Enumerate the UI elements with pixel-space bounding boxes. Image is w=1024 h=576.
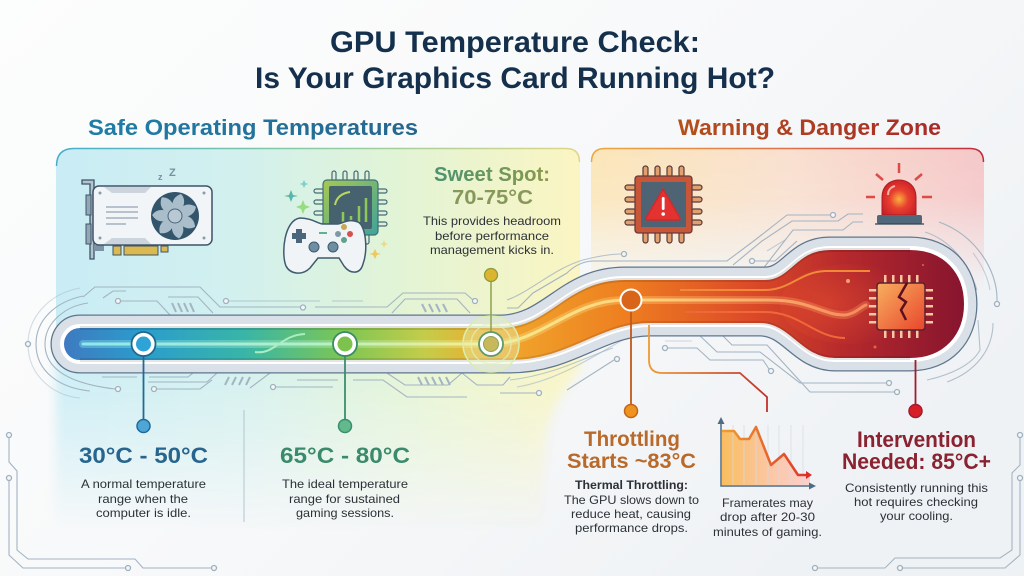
text block: throttling: performance drops. <box>575 521 688 535</box>
text block: sweet spot: before performance <box>435 229 549 243</box>
title: GPU Temperature Check: <box>330 26 700 59</box>
icon: gaming chip and controller <box>284 171 388 273</box>
text block: 65-80 gaming: The ideal temperature <box>282 477 408 491</box>
chart: framerate drop <box>718 417 816 490</box>
text block: 30-50 idle: 30°C - 50°C <box>79 443 208 468</box>
text block: framerates: drop after 20-30 <box>720 510 815 524</box>
icon: graphics card with zz: Z <box>169 167 176 179</box>
circuit traces <box>9 214 1020 568</box>
text block: intervention: hot requires checking <box>854 495 978 509</box>
icon: graphics card with zz <box>82 167 212 259</box>
text block: throttling: Starts ~83°C <box>567 450 696 473</box>
text block: sweet spot <box>423 164 561 257</box>
heading: safe operating temperatures: Safe Operating Temperatures <box>88 115 418 140</box>
icon: graphics card with zz: z <box>158 172 163 182</box>
text block: intervention <box>842 427 991 523</box>
marker: throttling <box>620 290 642 418</box>
text block: throttling: Throttling <box>584 428 680 451</box>
marker: idle 30-50 <box>132 332 156 432</box>
icon: chip with warning triangle <box>625 166 702 243</box>
text block: throttling: The GPU slows down to <box>564 493 699 507</box>
title: Is Your Graphics Card Running Hot? <box>255 62 775 95</box>
text block: intervention: Consistently running this <box>845 481 988 495</box>
text block: intervention: Intervention <box>857 427 976 452</box>
text block: 65-80 gaming <box>280 443 410 520</box>
text block: throttling: reduce heat, causing <box>571 507 691 521</box>
text block: intervention: Needed: 85°C+ <box>842 449 991 474</box>
text block: framerates <box>713 496 822 539</box>
text block: framerates: minutes of gaming. <box>713 525 822 539</box>
panel: safe operating temperatures <box>51 148 585 508</box>
text block: sweet spot: 70-75°C <box>452 187 533 209</box>
text block: sweet spot: This provides headroom <box>423 214 561 228</box>
circuit trace nodes <box>6 212 1022 570</box>
connector: framerate line <box>649 325 767 412</box>
divider between ranges <box>243 410 245 522</box>
text block: sweet spot: management kicks in. <box>430 243 554 257</box>
text block: 30-50 idle: range when the <box>98 492 188 506</box>
text block: 30-50 idle: computer is idle. <box>96 506 191 520</box>
text block: intervention: your cooling. <box>880 509 953 523</box>
text block: 65-80 gaming: gaming sessions. <box>296 506 394 520</box>
icon: cracked overheating chip <box>846 264 933 348</box>
title <box>255 26 775 95</box>
text block: 65-80 gaming: range for sustained <box>289 492 400 506</box>
text block: framerates: Framerates may <box>722 496 813 510</box>
text block: throttling <box>564 428 699 535</box>
marker: intervention <box>909 360 922 418</box>
marker: sweet spot halo <box>463 268 519 372</box>
marker: gaming 65-80 <box>333 332 357 432</box>
heading: warning and danger zone: Warning & Danger Zone <box>678 115 941 140</box>
icon: red alarm siren <box>866 163 932 224</box>
text block: throttling: Thermal Throttling: <box>575 478 688 492</box>
hatch marks <box>172 303 450 385</box>
text block: sweet spot: Sweet Spot: <box>434 164 550 186</box>
panel: warning and danger zone <box>590 148 984 272</box>
temperature tube <box>62 248 966 362</box>
text block: 30-50 idle: A normal temperature <box>81 477 206 491</box>
text block: 30-50 idle <box>79 443 208 520</box>
text block: 65-80 gaming: 65°C - 80°C <box>280 443 410 468</box>
